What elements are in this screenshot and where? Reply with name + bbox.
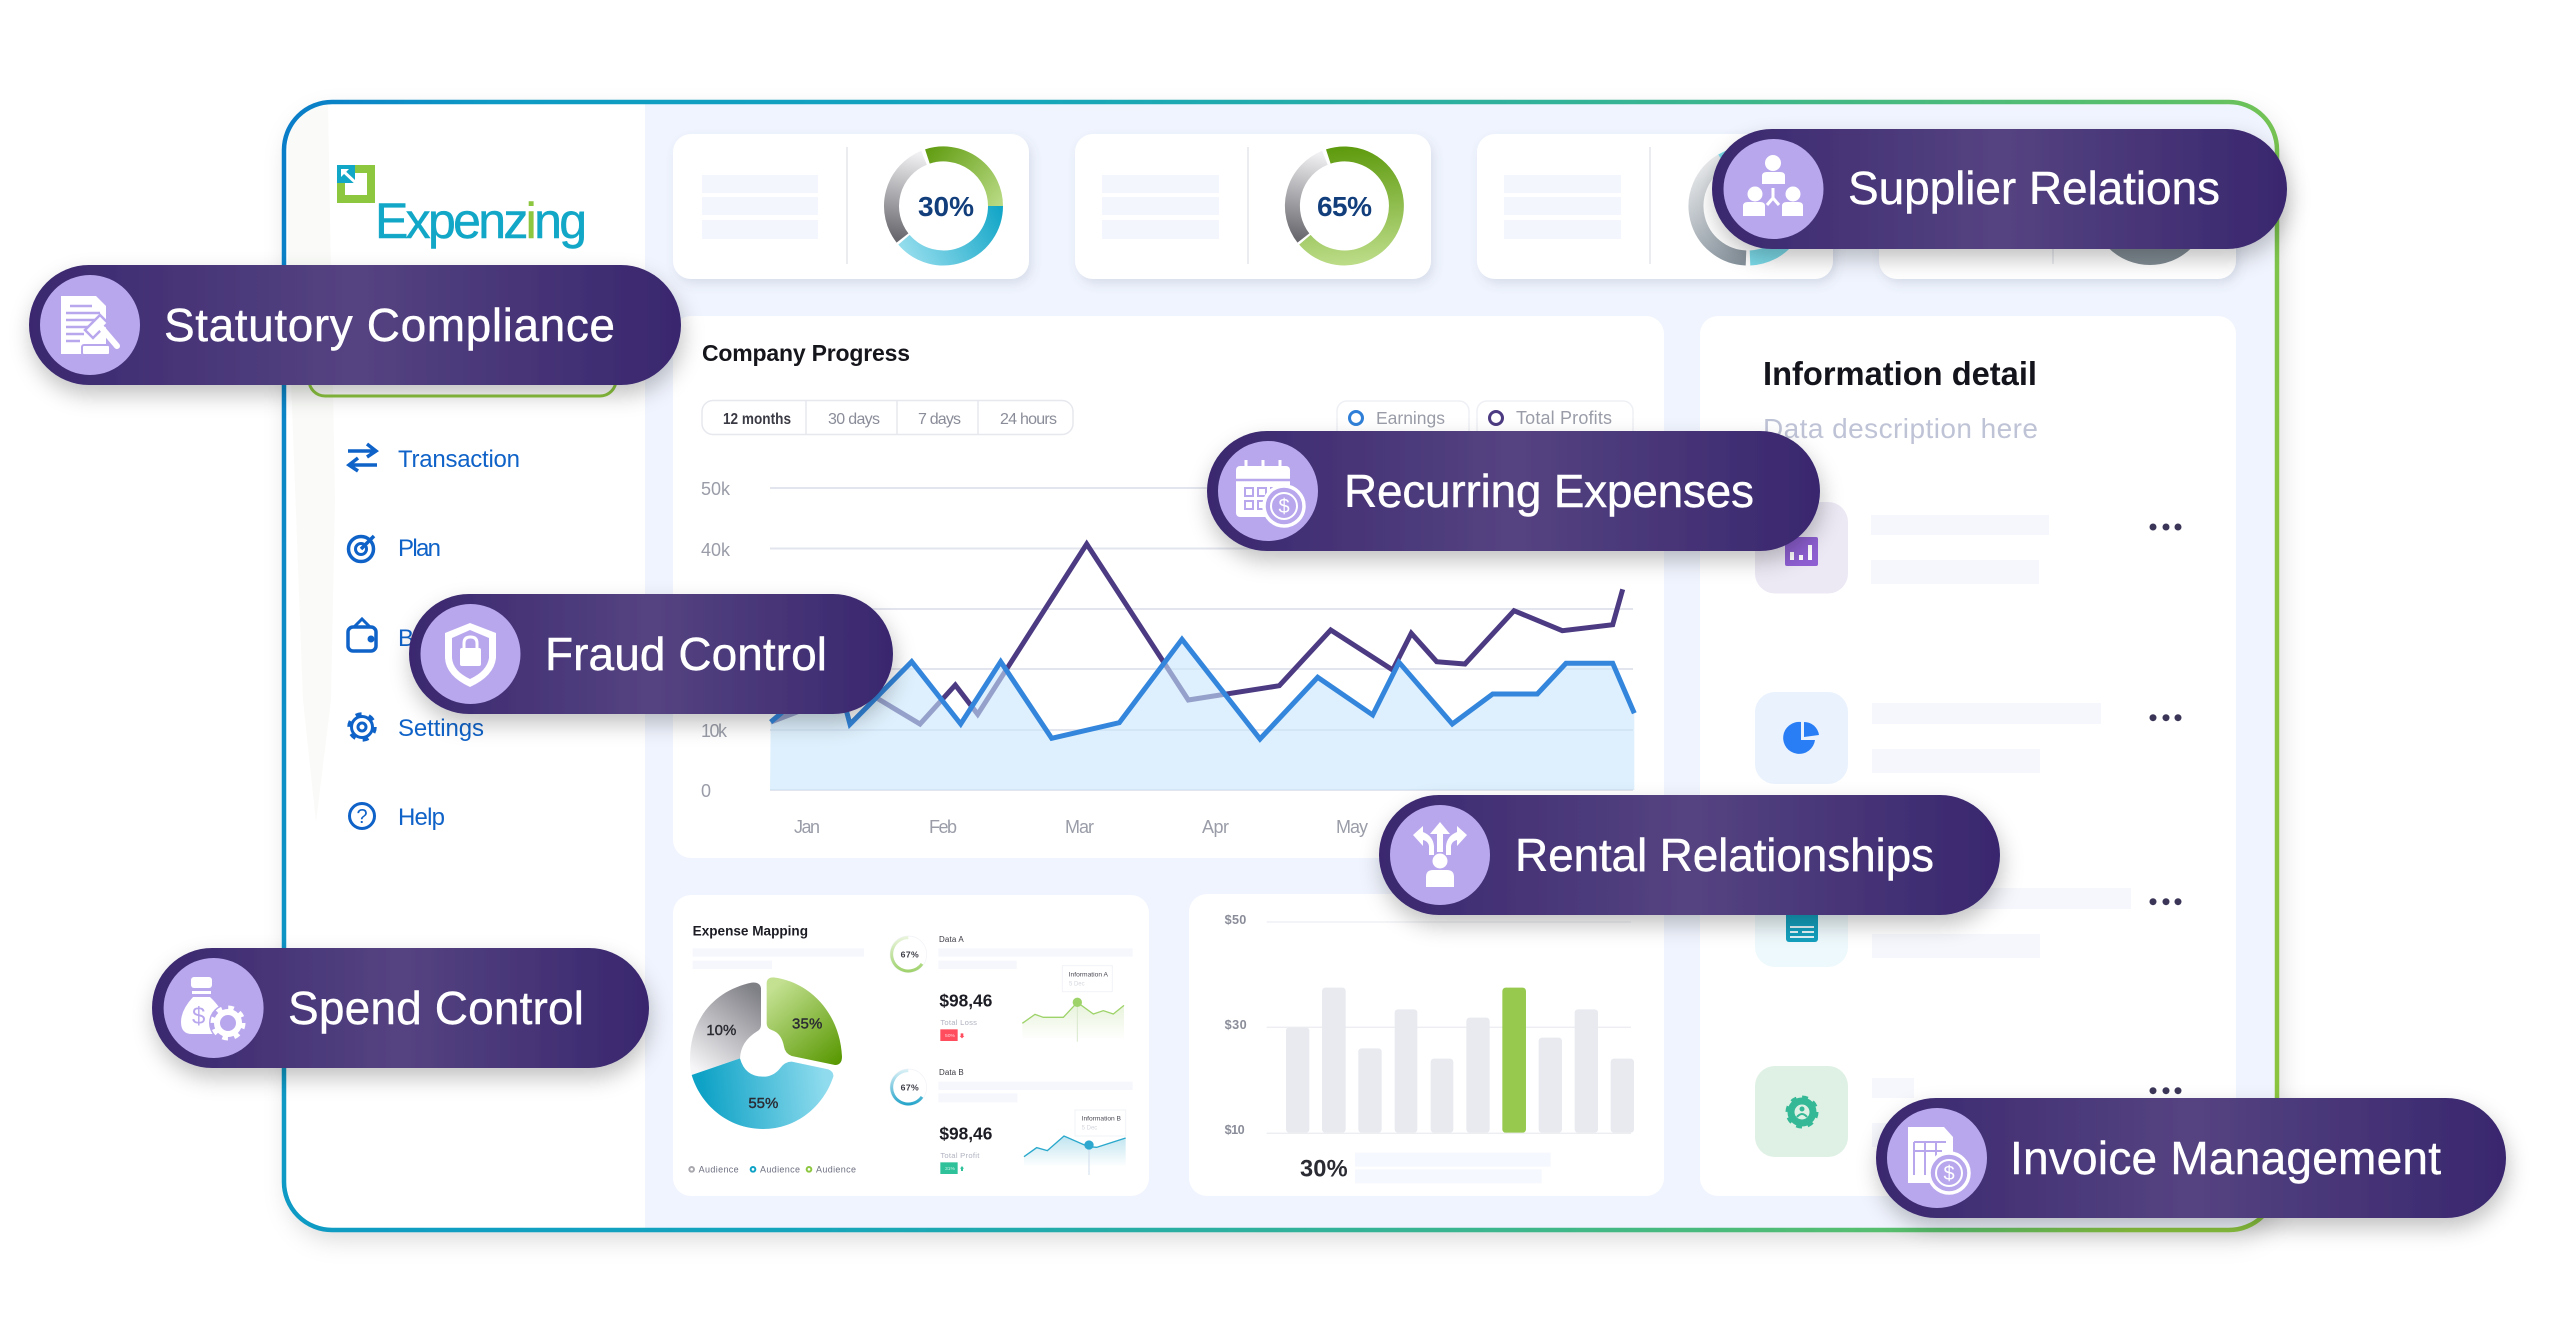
pie legend (689, 1165, 856, 1175)
data A: $98,46 (939, 991, 993, 1011)
sidebar (309, 165, 616, 831)
panel: stat card 4 (1879, 134, 2236, 279)
frame border (284, 102, 2277, 1230)
chart legend: Earnings (1376, 408, 1445, 428)
callout: spend control: Spend Control (288, 982, 584, 1034)
icon: invoice with coin (1908, 1127, 1969, 1193)
callout: invoice management: Invoice Management (2010, 1132, 2441, 1184)
menu item: budget: Budget (398, 625, 474, 652)
panel: expense mapping (673, 895, 1149, 1196)
icon: calendar with coin: $ (1278, 496, 1290, 518)
callout: invoice management (1876, 1098, 2506, 1218)
icon: document (1786, 900, 1818, 942)
panel description: Data description here (1763, 413, 2038, 444)
icon: money bag with gear (181, 977, 247, 1042)
pie legend: Audience (816, 1165, 856, 1175)
chart legend: Total Profits (1516, 408, 1612, 428)
icon: shield with lock (445, 623, 496, 687)
logo wordmark: Expenzing (375, 193, 587, 249)
pie chart: 35% (792, 1016, 822, 1033)
donut chart 65% (1292, 154, 1396, 258)
panel: company progress chart (673, 316, 1664, 858)
icon: calendar with coin (1236, 460, 1304, 526)
y axis labels (701, 479, 731, 801)
stat 30%: 30% (1300, 1157, 1348, 1183)
area: earnings (770, 639, 1634, 790)
sparkline A: Information A (1069, 972, 1109, 979)
y axis labels: 0 (701, 781, 711, 801)
menu item: plan (348, 535, 441, 562)
x axis labels (794, 817, 1368, 837)
x axis labels: Jan (794, 817, 820, 837)
logo mark (337, 165, 375, 203)
menu item: budget (348, 619, 474, 652)
row 4 (1755, 1066, 2182, 1157)
bars (1286, 988, 1634, 1133)
donut chart 3 (1696, 154, 1800, 258)
data B: 31% (945, 1166, 956, 1172)
callout: rental relationships (1379, 795, 2000, 915)
icon: bar chart (1785, 537, 1818, 566)
icon: document and gavel (61, 296, 117, 355)
data A: Total Loss (940, 1018, 977, 1027)
panel: stat card 30% (673, 134, 1029, 279)
row 3 (1755, 875, 2182, 967)
sparkline B: Information B (1082, 1116, 1122, 1123)
callout: rental relationships: Rental Relationships (1515, 829, 1934, 881)
data A: 67% (901, 949, 919, 959)
data A: Data A (939, 935, 964, 944)
icon: gear (1788, 1098, 1816, 1126)
data B: $98,46 (939, 1124, 993, 1144)
menu item: transaction: Transaction (398, 446, 520, 473)
callout: supplier relations: Supplier Relations (1848, 162, 2220, 214)
icon: person with arrows (1413, 822, 1467, 887)
time range tabs (702, 400, 1073, 434)
x axis labels: Apr (1202, 817, 1229, 837)
y axis labels (1225, 913, 1247, 1137)
dashboard frame background (284, 102, 2277, 1230)
x axis labels: Mar (1065, 817, 1094, 837)
icon: money bag with gear: $ (192, 1003, 205, 1030)
time range tabs: 7 days (918, 411, 961, 428)
sparkline B (1024, 1110, 1126, 1175)
panel: bar chart (1189, 894, 1664, 1196)
panel heading: Information detail (1763, 355, 2037, 392)
panel: information detail (1700, 316, 2236, 1196)
data B: Data B (939, 1068, 964, 1077)
y axis labels: 20k (701, 661, 731, 681)
panel: stat card 65% (1075, 134, 1431, 279)
callout: statutory compliance (29, 265, 681, 385)
menu item: help (350, 804, 445, 831)
pie chart (690, 977, 842, 1129)
menu item: settings: Settings (398, 715, 484, 742)
icon: people hierarchy (1743, 155, 1803, 216)
donut chart 30% (891, 154, 996, 258)
data A: 50% (945, 1033, 956, 1039)
sparkline B: 5 Dec (1082, 1125, 1097, 1131)
pie legend: Audience (760, 1165, 800, 1175)
menu item: plan: Plan (398, 535, 441, 562)
donut chart 65%: 65% (1317, 191, 1372, 222)
menu item: help: Help (398, 804, 445, 831)
callout: fraud control (409, 594, 893, 714)
pie chart: 10% (706, 1022, 736, 1039)
y axis labels: 40k (701, 540, 731, 560)
callout: fraud control: Fraud Control (545, 628, 827, 680)
y axis labels: 10k (701, 721, 728, 741)
donut chart 30%: 30% (918, 191, 974, 222)
chart title: Company Progress (702, 340, 910, 366)
row 1 (1755, 502, 2182, 594)
x axis labels: May (1336, 817, 1368, 837)
menu item: transaction (348, 444, 520, 473)
chart legend (1337, 401, 1633, 445)
callout: recurring expenses: Recurring Expenses (1344, 465, 1754, 517)
sparkline A (1022, 966, 1124, 1042)
callout: recurring expenses (1207, 431, 1820, 551)
y axis labels: 50k (701, 479, 731, 499)
pie legend: Audience (699, 1165, 739, 1175)
data A (890, 935, 1133, 1042)
panel: stat card 3 (1477, 134, 1833, 279)
callout: statutory compliance: Statutory Compliance (164, 299, 615, 351)
data B (890, 1068, 1133, 1175)
pie chart: 55% (748, 1095, 778, 1112)
icon: invoice with coin: $ (1943, 1163, 1955, 1185)
callout: spend control (152, 948, 649, 1068)
x axis labels: Feb (929, 817, 957, 837)
row 2 (1755, 692, 2182, 784)
donut chart 4 (2100, 156, 2200, 256)
time range tabs: 24 hours (1000, 411, 1057, 428)
y axis labels: $30 (1225, 1018, 1247, 1032)
time range tabs: 30 days (828, 411, 880, 428)
time range tabs: 12 months (723, 411, 791, 428)
stat 30% (1300, 1153, 1551, 1183)
data B: 67% (901, 1082, 919, 1092)
y axis labels: 30k (701, 600, 731, 620)
menu item: help: ? (356, 806, 368, 828)
active menu outline (309, 340, 616, 396)
y axis labels: $10 (1225, 1123, 1245, 1137)
sparkline A: 5 Dec (1069, 981, 1085, 987)
icon: pie chart (1783, 722, 1819, 754)
line: total profits (771, 544, 1623, 724)
menu item: settings (349, 714, 484, 742)
callout: supplier relations (1712, 129, 2287, 249)
line: earnings (771, 639, 1634, 739)
logo (337, 165, 587, 249)
y axis labels: $50 (1225, 913, 1246, 927)
panel heading: Expense Mapping (693, 923, 808, 939)
data B: Total Profit (940, 1151, 980, 1160)
